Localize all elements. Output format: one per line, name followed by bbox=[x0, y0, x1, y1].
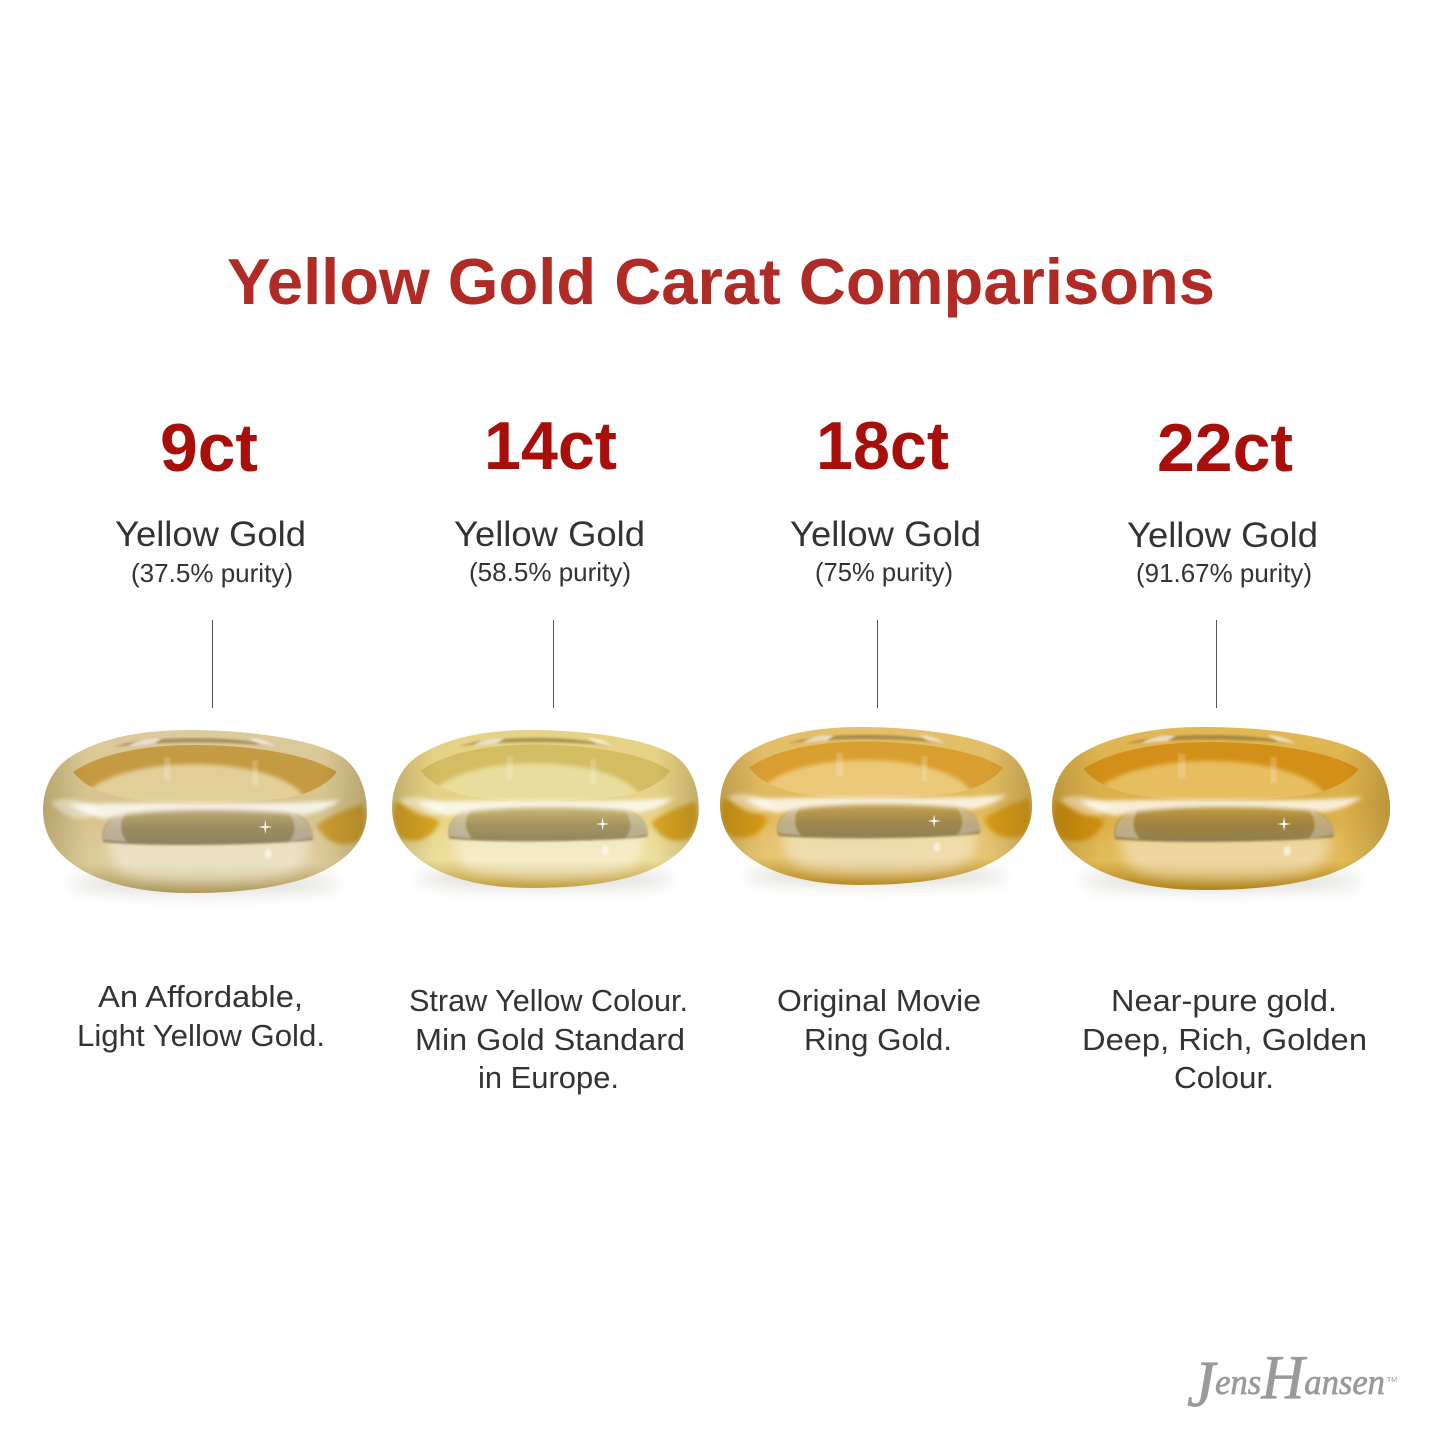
9ct metal and purity bbox=[115, 515, 306, 588]
leader line: 9ct bbox=[212, 620, 214, 708]
description: 18ct: Original Movie bbox=[777, 983, 981, 1018]
22ct metal and purity: (91.67% purity) bbox=[1136, 558, 1312, 588]
18ct metal and purity bbox=[790, 515, 981, 587]
leader line: 14ct bbox=[552, 620, 554, 708]
description: 22ct: Near-pure gold. bbox=[1111, 983, 1337, 1018]
9ct metal and purity: (37.5% purity) bbox=[131, 558, 293, 588]
logo: Jens Hansen: TM bbox=[1387, 1377, 1397, 1384]
logo: Jens Hansen: ens bbox=[1215, 1362, 1261, 1402]
column: 18ct heading: 18ct bbox=[816, 408, 949, 484]
description: 9ct: Light Yellow Gold. bbox=[77, 1018, 325, 1053]
description: 22ct: Colour. bbox=[1174, 1060, 1274, 1095]
description: 14ct: Min Gold Standard bbox=[415, 1022, 685, 1057]
leader line: 22ct bbox=[1216, 620, 1218, 708]
14ct metal and purity: (58.5% purity) bbox=[469, 557, 631, 587]
description: 9ct: An Affordable, bbox=[98, 979, 303, 1014]
logo: Jens Hansen: J bbox=[1187, 1348, 1218, 1421]
description: 14ct bbox=[409, 983, 688, 1095]
description: 18ct bbox=[777, 983, 981, 1057]
description: 14ct: in Europe. bbox=[478, 1060, 619, 1095]
title: Yellow Gold Carat Comparisons bbox=[227, 245, 1215, 318]
18ct metal and purity: Yellow Gold bbox=[790, 515, 981, 554]
ring: 22ct bbox=[1052, 727, 1390, 890]
logo: Jens Hansen: ansen bbox=[1304, 1362, 1385, 1402]
14ct metal and purity bbox=[454, 515, 645, 587]
description: 22ct bbox=[1082, 983, 1367, 1095]
ring: 9ct bbox=[43, 730, 367, 893]
description: 18ct: Ring Gold. bbox=[804, 1022, 952, 1057]
column: 14ct heading: 14ct bbox=[484, 408, 617, 484]
ring: 14ct bbox=[392, 730, 699, 888]
column: 9ct heading: 9ct bbox=[160, 410, 258, 486]
logo: Jens Hansen bbox=[1187, 1344, 1397, 1421]
column: 22ct heading: 22ct bbox=[1157, 410, 1293, 486]
logo: Jens Hansen: H bbox=[1260, 1344, 1307, 1412]
9ct metal and purity: Yellow Gold bbox=[115, 515, 306, 554]
14ct metal and purity: Yellow Gold bbox=[454, 515, 645, 554]
ring: 18ct bbox=[720, 727, 1032, 885]
description: 22ct: Deep, Rich, Golden bbox=[1082, 1022, 1367, 1057]
22ct metal and purity bbox=[1127, 516, 1318, 588]
leader line: 18ct bbox=[876, 620, 878, 708]
description: 14ct: Straw Yellow Colour. bbox=[409, 983, 688, 1018]
description: 9ct bbox=[77, 979, 325, 1053]
18ct metal and purity: (75% purity) bbox=[815, 557, 953, 587]
22ct metal and purity: Yellow Gold bbox=[1127, 516, 1318, 555]
